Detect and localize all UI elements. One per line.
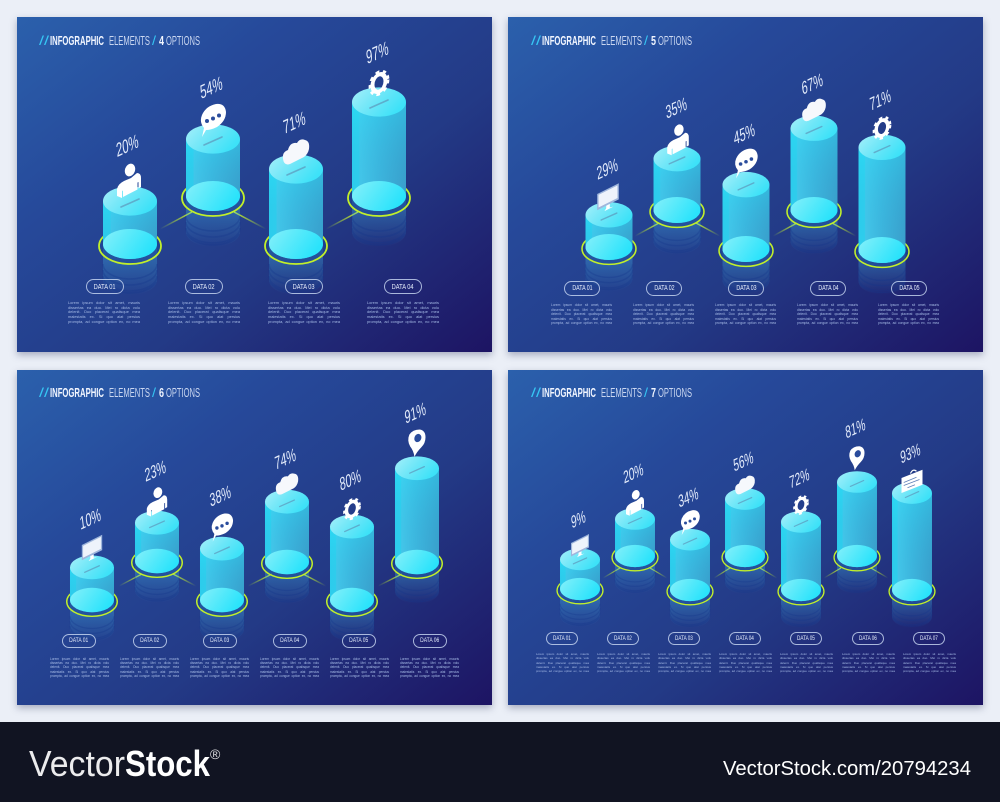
text block 7: [903, 652, 956, 673]
text block 4: prompta, ad congue option ex, no mea: [797, 321, 858, 325]
icon: gear: [345, 497, 359, 521]
label: data 04: DATA 04: [280, 637, 300, 644]
label: data 02: DATA 02: [654, 284, 674, 292]
text block 2: maiestatis ex. Si quo alat persius: [597, 665, 650, 669]
icon: monitor: [82, 535, 102, 561]
value 81%: 81%: [844, 415, 867, 443]
text block 7: maiestatis ex. Si quo alat persius: [903, 665, 956, 669]
text block 4: maiestatis ex. Si quo alat persius: [797, 316, 858, 320]
cylinder 1: 9%: [557, 549, 603, 627]
title: 4: [159, 34, 164, 48]
text block 3: Lorem ipsum dolor sit amet, mauris: [715, 303, 776, 307]
cylinder 4: 56%: [722, 488, 768, 594]
value 23%: 23%: [144, 457, 167, 487]
footer bar: [0, 722, 1000, 802]
text block 1: Lorem ipsum dolor sit amet, mauris: [50, 656, 109, 660]
panel: 5 options: [508, 17, 983, 352]
label: data 03: [285, 279, 323, 294]
text block 2: prompta, ad congue option ex, no mea: [168, 319, 240, 324]
value 71%: 71%: [282, 107, 307, 139]
text block 6: prompta, ad congue option ex, no mea: [842, 669, 895, 673]
text block 6: maiestatis ex. Si quo alat persius: [400, 670, 459, 674]
value 67%: 67%: [801, 70, 824, 100]
text block 5: delenit. Duo placerat qualisque mea: [330, 665, 389, 669]
text block 5: maiestatis ex. Si quo alat persius: [780, 665, 833, 669]
value 20%: 20%: [115, 130, 140, 162]
value 80%: 80%: [339, 466, 362, 496]
connector lines: [119, 574, 402, 586]
text block 2: Lorem ipsum dolor sit amet, mauris: [597, 652, 650, 656]
title: //: [39, 386, 50, 400]
cylinder 5: 71%: [855, 135, 909, 294]
icon: gear: [370, 69, 388, 97]
icon: cloud: [276, 473, 298, 495]
cylinder 2: 35%: [650, 146, 704, 254]
label: data 01: DATA 01: [572, 284, 592, 292]
value 56%: 56%: [732, 448, 755, 476]
label: data 04: [729, 632, 761, 644]
label: data 03: DATA 03: [736, 284, 756, 292]
label: data 06: DATA 06: [420, 637, 440, 644]
text block 1: Lorem ipsum dolor sit amet, mauris: [551, 303, 612, 307]
text block 3: [190, 656, 249, 678]
title: INFOGRAPHIC: [542, 386, 596, 400]
chart: 6 cylinders: [39, 386, 443, 638]
label: data 02: [133, 634, 167, 648]
icon: cloud: [802, 99, 826, 121]
title: OPTIONS: [166, 386, 200, 400]
text block 5: [330, 656, 389, 678]
text block 5: Lorem ipsum dolor sit amet, mauris: [330, 656, 389, 660]
label: data 01: DATA 01: [69, 637, 89, 644]
text block 4: [367, 300, 439, 324]
cylinder 6: 91%: [392, 456, 442, 604]
text block 3: dissertas ea duo. Mei ro dicta volu: [268, 305, 340, 310]
cylinder 7: 93%: [889, 482, 935, 628]
text block 3: delenit. Duo placerat qualisque mea: [715, 312, 776, 316]
title: ELEMENTS: [601, 386, 642, 400]
panel: 6 options: [17, 370, 492, 705]
label: data 04: DATA 04: [392, 282, 414, 291]
text block 2: dissertas ea duo. Mei ro dicta volu: [168, 305, 240, 310]
cylinder 3: 38%: [197, 537, 247, 642]
text block 3: maiestatis ex. Si quo alat persius: [658, 665, 711, 669]
cylinder 5: 72%: [778, 511, 824, 628]
label: data 05: [342, 634, 376, 648]
value 38%: 38%: [209, 482, 232, 512]
text block 3: delenit. Duo placerat qualisque mea: [268, 309, 340, 314]
text block 4: [260, 656, 319, 678]
label: data 01: [564, 280, 600, 296]
text block 4: Lorem ipsum dolor sit amet, mauris: [260, 656, 319, 660]
text block 1: prompta, ad congue option ex, no mea: [551, 321, 612, 325]
icon: cloud: [735, 476, 755, 494]
text block 1: delenit. Duo placerat qualisque mea: [50, 665, 109, 669]
text block 4: [719, 652, 772, 673]
text block 3: prompta, ad congue option ex, no mea: [190, 674, 249, 678]
text block 1: dissertas ea duo. Mei ro dicta volu: [68, 305, 140, 310]
label: data 03: DATA 03: [293, 282, 315, 291]
text block 1: delenit. Duo placerat qualisque mea: [68, 309, 140, 314]
text block 1: Lorem ipsum dolor sit amet, mauris: [536, 652, 589, 656]
text block 3: maiestatis ex. Si quo alat persius: [268, 314, 340, 319]
connector lines: [160, 212, 358, 229]
text block 3: dissertas ea duo. Mei ro dicta volu: [658, 656, 711, 660]
text block 7: delenit. Duo placerat qualisque mea: [903, 661, 956, 665]
title: ELEMENTS: [601, 34, 642, 48]
text block 2: [633, 303, 694, 325]
connector lines: [635, 223, 856, 236]
value 10%: 10%: [79, 505, 102, 535]
label: data 04: DATA 04: [736, 634, 754, 642]
text block 1: delenit. Duo placerat qualisque mea: [551, 312, 612, 316]
label: data 05: [891, 280, 927, 296]
cylinder 2: 20%: [612, 508, 658, 594]
text block 4: Lorem ipsum dolor sit amet, mauris: [797, 303, 858, 307]
label: data 05: [790, 632, 822, 644]
value 74%: 74%: [274, 445, 297, 475]
cylinder 4: 97%: [348, 87, 410, 247]
icon: person: [147, 486, 167, 516]
text block 5: prompta, ad congue option ex, no mea: [780, 669, 833, 673]
text block 1: delenit. Duo placerat qualisque mea: [536, 661, 589, 665]
value 97%: 97%: [365, 37, 390, 69]
text block 2: maiestatis ex. Si quo alat persius: [120, 670, 179, 674]
text block 4: dissertas ea duo. Mei ro dicta volu: [719, 656, 772, 660]
cylinder 1: 29%: [582, 202, 636, 291]
text block 4: delenit. Duo placerat qualisque mea: [797, 312, 858, 316]
text block 5: maiestatis ex. Si quo alat persius: [878, 316, 939, 320]
text block 3: prompta, ad congue option ex, no mea: [658, 669, 711, 673]
title: 6: [159, 386, 164, 400]
text block 1: [536, 652, 589, 673]
text block 2: maiestatis ex. Si quo alat persius: [168, 314, 240, 319]
label: data 05: DATA 05: [349, 637, 369, 644]
text block 4: prompta, ad congue option ex, no mea: [719, 669, 772, 673]
panel: 4 options: [17, 17, 492, 352]
text block 1: prompta, ad congue option ex, no mea: [68, 319, 140, 324]
text block 3: Lorem ipsum dolor sit amet, mauris: [268, 300, 340, 305]
cylinder 3: 71%: [265, 154, 327, 295]
text block 1: maiestatis ex. Si quo alat persius: [50, 670, 109, 674]
text block 5: prompta, ad congue option ex, no mea: [330, 674, 389, 678]
text block 2: maiestatis ex. Si quo alat persius: [633, 316, 694, 320]
icon: person: [667, 123, 689, 155]
label: data 02: DATA 02: [140, 637, 160, 644]
title: 7: [651, 386, 656, 400]
icon: gear: [794, 494, 808, 516]
text block 1: maiestatis ex. Si quo alat persius: [536, 665, 589, 669]
label: data 06: [413, 634, 447, 648]
title: /: [152, 386, 157, 400]
text block 6: maiestatis ex. Si quo alat persius: [842, 665, 895, 669]
title: [531, 34, 692, 48]
cylinder 3: 34%: [667, 529, 713, 628]
text block 1: dissertas ea duo. Mei ro dicta volu: [551, 308, 612, 312]
text block 1: [551, 303, 612, 325]
label: data 05: DATA 05: [899, 284, 919, 292]
value 93%: 93%: [899, 440, 922, 468]
value 34%: 34%: [677, 484, 700, 512]
icon: chat bubble: [212, 513, 233, 542]
text block 4: dissertas ea duo. Mei ro dicta volu: [367, 305, 439, 310]
icon: mail: [902, 470, 922, 493]
title: //: [531, 34, 542, 48]
chart: 7 cylinders: [531, 386, 936, 626]
text block 3: dissertas ea duo. Mei ro dicta volu: [715, 308, 776, 312]
chart: 4 cylinders: [39, 34, 411, 288]
label: data 01: [546, 632, 578, 644]
title: INFOGRAPHIC: [542, 34, 596, 48]
text block 3: delenit. Duo placerat qualisque mea: [658, 661, 711, 665]
title: /: [644, 386, 649, 400]
icon: chat bubble: [681, 510, 700, 535]
label: data 01: DATA 01: [94, 282, 116, 291]
text block 3: [715, 303, 776, 325]
text block 4: delenit. Duo placerat qualisque mea: [367, 309, 439, 314]
cylinder 3: 45%: [719, 172, 773, 293]
text block 1: [50, 656, 109, 678]
title: //: [531, 386, 542, 400]
text block 2: prompta, ad congue option ex, no mea: [120, 674, 179, 678]
text block 4: dissertas ea duo. Mei ro dicta volu: [260, 661, 319, 665]
connector lines: [603, 568, 888, 578]
text block 3: Lorem ipsum dolor sit amet, mauris: [190, 656, 249, 660]
text block 6: prompta, ad congue option ex, no mea: [400, 674, 459, 678]
text block 2: dissertas ea duo. Mei ro dicta volu: [597, 656, 650, 660]
title: OPTIONS: [658, 386, 692, 400]
text block 2: Lorem ipsum dolor sit amet, mauris: [633, 303, 694, 307]
text block 2: delenit. Duo placerat qualisque mea: [597, 661, 650, 665]
title: [39, 34, 200, 48]
text block 6: [842, 652, 895, 673]
text block 5: Lorem ipsum dolor sit amet, mauris: [878, 303, 939, 307]
label: data 01: [62, 634, 96, 648]
label: data 06: DATA 06: [859, 634, 877, 642]
cylinder 4: 67%: [787, 116, 841, 254]
text block 4: dissertas ea duo. Mei ro dicta volu: [797, 308, 858, 312]
text block 3: maiestatis ex. Si quo alat persius: [715, 316, 776, 320]
icon: cloud: [283, 139, 309, 164]
label: data 04: [273, 634, 307, 648]
label: data 02: DATA 02: [193, 282, 215, 291]
label: data 03: [203, 634, 237, 648]
text block 1: prompta, ad congue option ex, no mea: [536, 669, 589, 673]
label: data 02: [185, 279, 223, 294]
label: data 03: DATA 03: [210, 637, 230, 644]
text block 2: [168, 300, 240, 324]
text block 6: delenit. Duo placerat qualisque mea: [400, 665, 459, 669]
label: data 03: [728, 280, 764, 296]
title: [39, 386, 200, 400]
icon: chat bubble: [201, 104, 226, 137]
text block 3: dissertas ea duo. Mei ro dicta volu: [190, 661, 249, 665]
text block 5: dissertas ea duo. Mei ro dicta volu: [330, 661, 389, 665]
value 72%: 72%: [788, 465, 811, 493]
logo: VectorStock: ®: [210, 746, 221, 762]
title: OPTIONS: [166, 34, 200, 48]
text block 5: dissertas ea duo. Mei ro dicta volu: [878, 308, 939, 312]
text block 2: Lorem ipsum dolor sit amet, mauris: [120, 656, 179, 660]
label: data 07: DATA 07: [920, 634, 938, 642]
label: data 03: DATA 03: [675, 634, 693, 642]
text block 3: delenit. Duo placerat qualisque mea: [190, 665, 249, 669]
text block 3: prompta, ad congue option ex, no mea: [715, 321, 776, 325]
cylinder 6: 81%: [834, 471, 880, 594]
text block 4: maiestatis ex. Si quo alat persius: [367, 314, 439, 319]
text block 2: [597, 652, 650, 673]
text block 2: prompta, ad congue option ex, no mea: [597, 669, 650, 673]
text block 3: maiestatis ex. Si quo alat persius: [190, 670, 249, 674]
label: data 02: [646, 280, 682, 296]
chart: 5 cylinders: [531, 34, 910, 292]
value 35%: 35%: [665, 94, 688, 124]
logo: VectorStock: Stock: [125, 743, 211, 784]
text block 6: dissertas ea duo. Mei ro dicta volu: [842, 656, 895, 660]
cylinder 2: 54%: [182, 124, 244, 247]
label: data 01: DATA 01: [553, 634, 571, 642]
text block 4: maiestatis ex. Si quo alat persius: [260, 670, 319, 674]
text block 2: dissertas ea duo. Mei ro dicta volu: [633, 308, 694, 312]
label: data 01: [86, 279, 124, 294]
text block 1: dissertas ea duo. Mei ro dicta volu: [536, 656, 589, 660]
text block 6: [400, 656, 459, 678]
text block 2: dissertas ea duo. Mei ro dicta volu: [120, 661, 179, 665]
text block 4: prompta, ad congue option ex, no mea: [260, 674, 319, 678]
panel: 7 options: [508, 370, 983, 705]
text block 2: delenit. Duo placerat qualisque mea: [168, 309, 240, 314]
label: data 04: DATA 04: [818, 284, 838, 292]
logo: VectorStock: Vector: [29, 743, 125, 784]
text block 3: Lorem ipsum dolor sit amet, mauris: [658, 652, 711, 656]
text block 3: prompta, ad congue option ex, no mea: [268, 319, 340, 324]
text block 5: dissertas ea duo. Mei ro dicta volu: [780, 656, 833, 660]
title: ELEMENTS: [109, 386, 150, 400]
text block 4: prompta, ad congue option ex, no mea: [367, 319, 439, 324]
image id: VectorStock.com/20794234: [723, 758, 971, 780]
text block 1: maiestatis ex. Si quo alat persius: [68, 314, 140, 319]
label: data 02: [607, 632, 639, 644]
icon: monitor: [597, 183, 619, 211]
text block 7: Lorem ipsum dolor sit amet, mauris: [903, 652, 956, 656]
label: data 04: [384, 279, 422, 294]
title: INFOGRAPHIC: [50, 386, 104, 400]
icon: gear: [874, 115, 890, 141]
text block 4: [797, 303, 858, 325]
cylinder 1: 10%: [67, 556, 117, 642]
label: data 07: [913, 632, 945, 644]
icon: location pin: [849, 446, 864, 470]
icon: monitor: [571, 534, 589, 557]
text block 1: [68, 300, 140, 324]
title: /: [644, 34, 649, 48]
value 29%: 29%: [596, 155, 619, 185]
text block 2: prompta, ad congue option ex, no mea: [633, 321, 694, 325]
text block 6: Lorem ipsum dolor sit amet, mauris: [400, 656, 459, 660]
icon: location pin: [408, 430, 426, 457]
text block 4: delenit. Duo placerat qualisque mea: [260, 665, 319, 669]
cylinder 4: 74%: [262, 490, 312, 604]
text block 2: [120, 656, 179, 678]
text block 5: delenit. Duo placerat qualisque mea: [780, 661, 833, 665]
text block 1: maiestatis ex. Si quo alat persius: [551, 316, 612, 320]
label: data 02: DATA 02: [614, 634, 632, 642]
text block 5: [878, 303, 939, 325]
value 71%: 71%: [869, 86, 892, 116]
text block 4: Lorem ipsum dolor sit amet, mauris: [367, 300, 439, 305]
icon: person: [626, 489, 644, 516]
text block 6: dissertas ea duo. Mei ro dicta volu: [400, 661, 459, 665]
text block 5: [780, 652, 833, 673]
logo: VectorStock: [29, 743, 221, 784]
text block 1: dissertas ea duo. Mei ro dicta volu: [50, 661, 109, 665]
icon: person: [117, 162, 141, 198]
text block 4: maiestatis ex. Si quo alat persius: [719, 665, 772, 669]
value 45%: 45%: [733, 120, 756, 150]
text block 5: maiestatis ex. Si quo alat persius: [330, 670, 389, 674]
title: ELEMENTS: [109, 34, 150, 48]
title: /: [152, 34, 157, 48]
label: data 04: [810, 280, 846, 296]
value 54%: 54%: [199, 72, 224, 104]
text block 4: Lorem ipsum dolor sit amet, mauris: [719, 652, 772, 656]
icon: chat bubble: [735, 149, 758, 178]
text block 5: delenit. Duo placerat qualisque mea: [878, 312, 939, 316]
title: 5: [651, 34, 656, 48]
text block 7: dissertas ea duo. Mei ro dicta volu: [903, 656, 956, 660]
text block 4: delenit. Duo placerat qualisque mea: [719, 661, 772, 665]
cylinder 1: 20%: [99, 186, 161, 295]
text block 2: delenit. Duo placerat qualisque mea: [120, 665, 179, 669]
label: data 05: DATA 05: [797, 634, 815, 642]
value 20%: 20%: [622, 460, 645, 488]
label: data 03: [668, 632, 700, 644]
text block 6: delenit. Duo placerat qualisque mea: [842, 661, 895, 665]
cylinder 5: 80%: [327, 515, 377, 642]
text block 3: [658, 652, 711, 673]
text block 7: prompta, ad congue option ex, no mea: [903, 669, 956, 673]
text block 1: prompta, ad congue option ex, no mea: [50, 674, 109, 678]
text block 6: Lorem ipsum dolor sit amet, mauris: [842, 652, 895, 656]
value 91%: 91%: [404, 399, 427, 429]
label: data 06: [852, 632, 884, 644]
title: OPTIONS: [658, 34, 692, 48]
text block 1: Lorem ipsum dolor sit amet, mauris: [68, 300, 140, 305]
cylinder 2: 23%: [132, 511, 182, 603]
text block 3: [268, 300, 340, 324]
text block 5: prompta, ad congue option ex, no mea: [878, 321, 939, 325]
title: INFOGRAPHIC: [50, 34, 104, 48]
title: //: [39, 34, 50, 48]
text block 2: Lorem ipsum dolor sit amet, mauris: [168, 300, 240, 305]
value 9%: 9%: [570, 507, 587, 533]
title: [531, 386, 692, 400]
text block 2: delenit. Duo placerat qualisque mea: [633, 312, 694, 316]
text block 5: Lorem ipsum dolor sit amet, mauris: [780, 652, 833, 656]
